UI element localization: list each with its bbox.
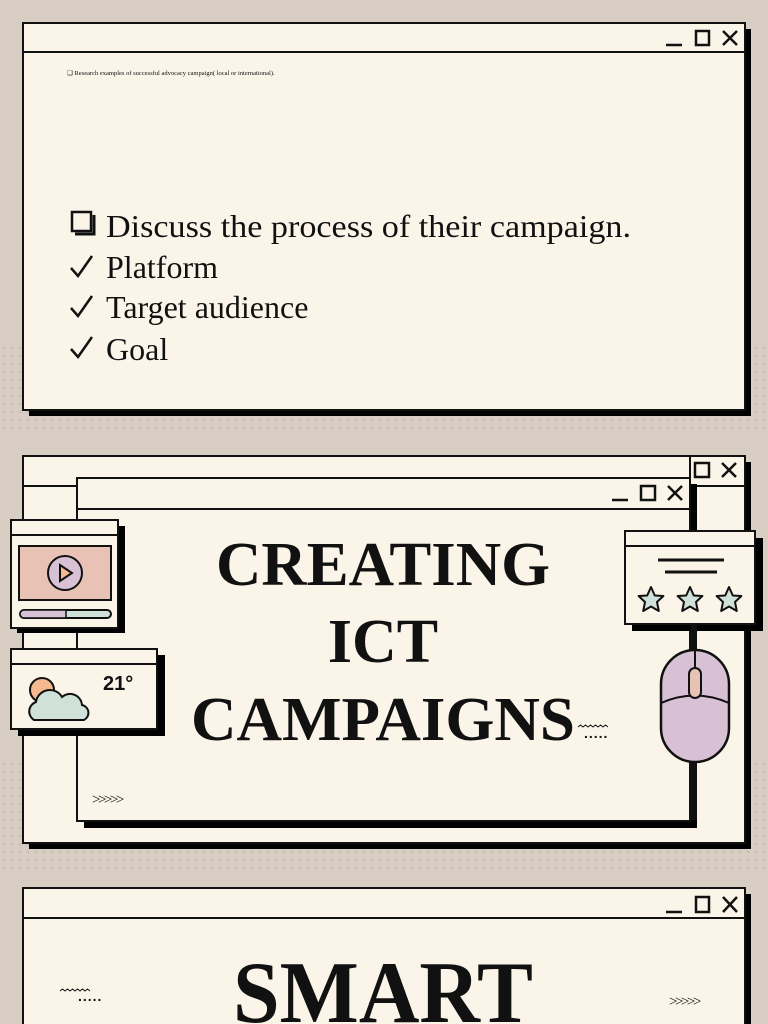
small text: ❑ Research examples of successful advocacy campaign( local or international). [67, 69, 275, 77]
title: ICT [328, 608, 438, 676]
list: Goal [106, 331, 168, 367]
window controls [666, 31, 737, 45]
icon: mouse [661, 624, 729, 820]
decoration: ..... [78, 988, 102, 1004]
list: Target audience [106, 289, 308, 325]
icon: weather widget: 21° [103, 673, 133, 695]
title: CAMPAIGNS [191, 686, 575, 754]
icon: rating widget [625, 531, 763, 631]
title [191, 531, 575, 754]
list: Platform [106, 249, 218, 285]
panel: slide 1 [23, 23, 751, 416]
icon: video widget [11, 520, 125, 633]
list: Discuss the process of their campaign. [106, 208, 631, 244]
decoration: squiggle dots: ..... [584, 725, 608, 741]
arrows: >>>>> [92, 792, 124, 808]
inner window [77, 478, 697, 828]
list [71, 208, 631, 367]
decoration: >>>>> [669, 994, 701, 1010]
panel: slide 2 [11, 456, 763, 849]
decoration [60, 988, 701, 1010]
panel: slide 3 [23, 888, 751, 1024]
icon: weather widget [11, 649, 165, 736]
title: CREATING [216, 531, 550, 599]
